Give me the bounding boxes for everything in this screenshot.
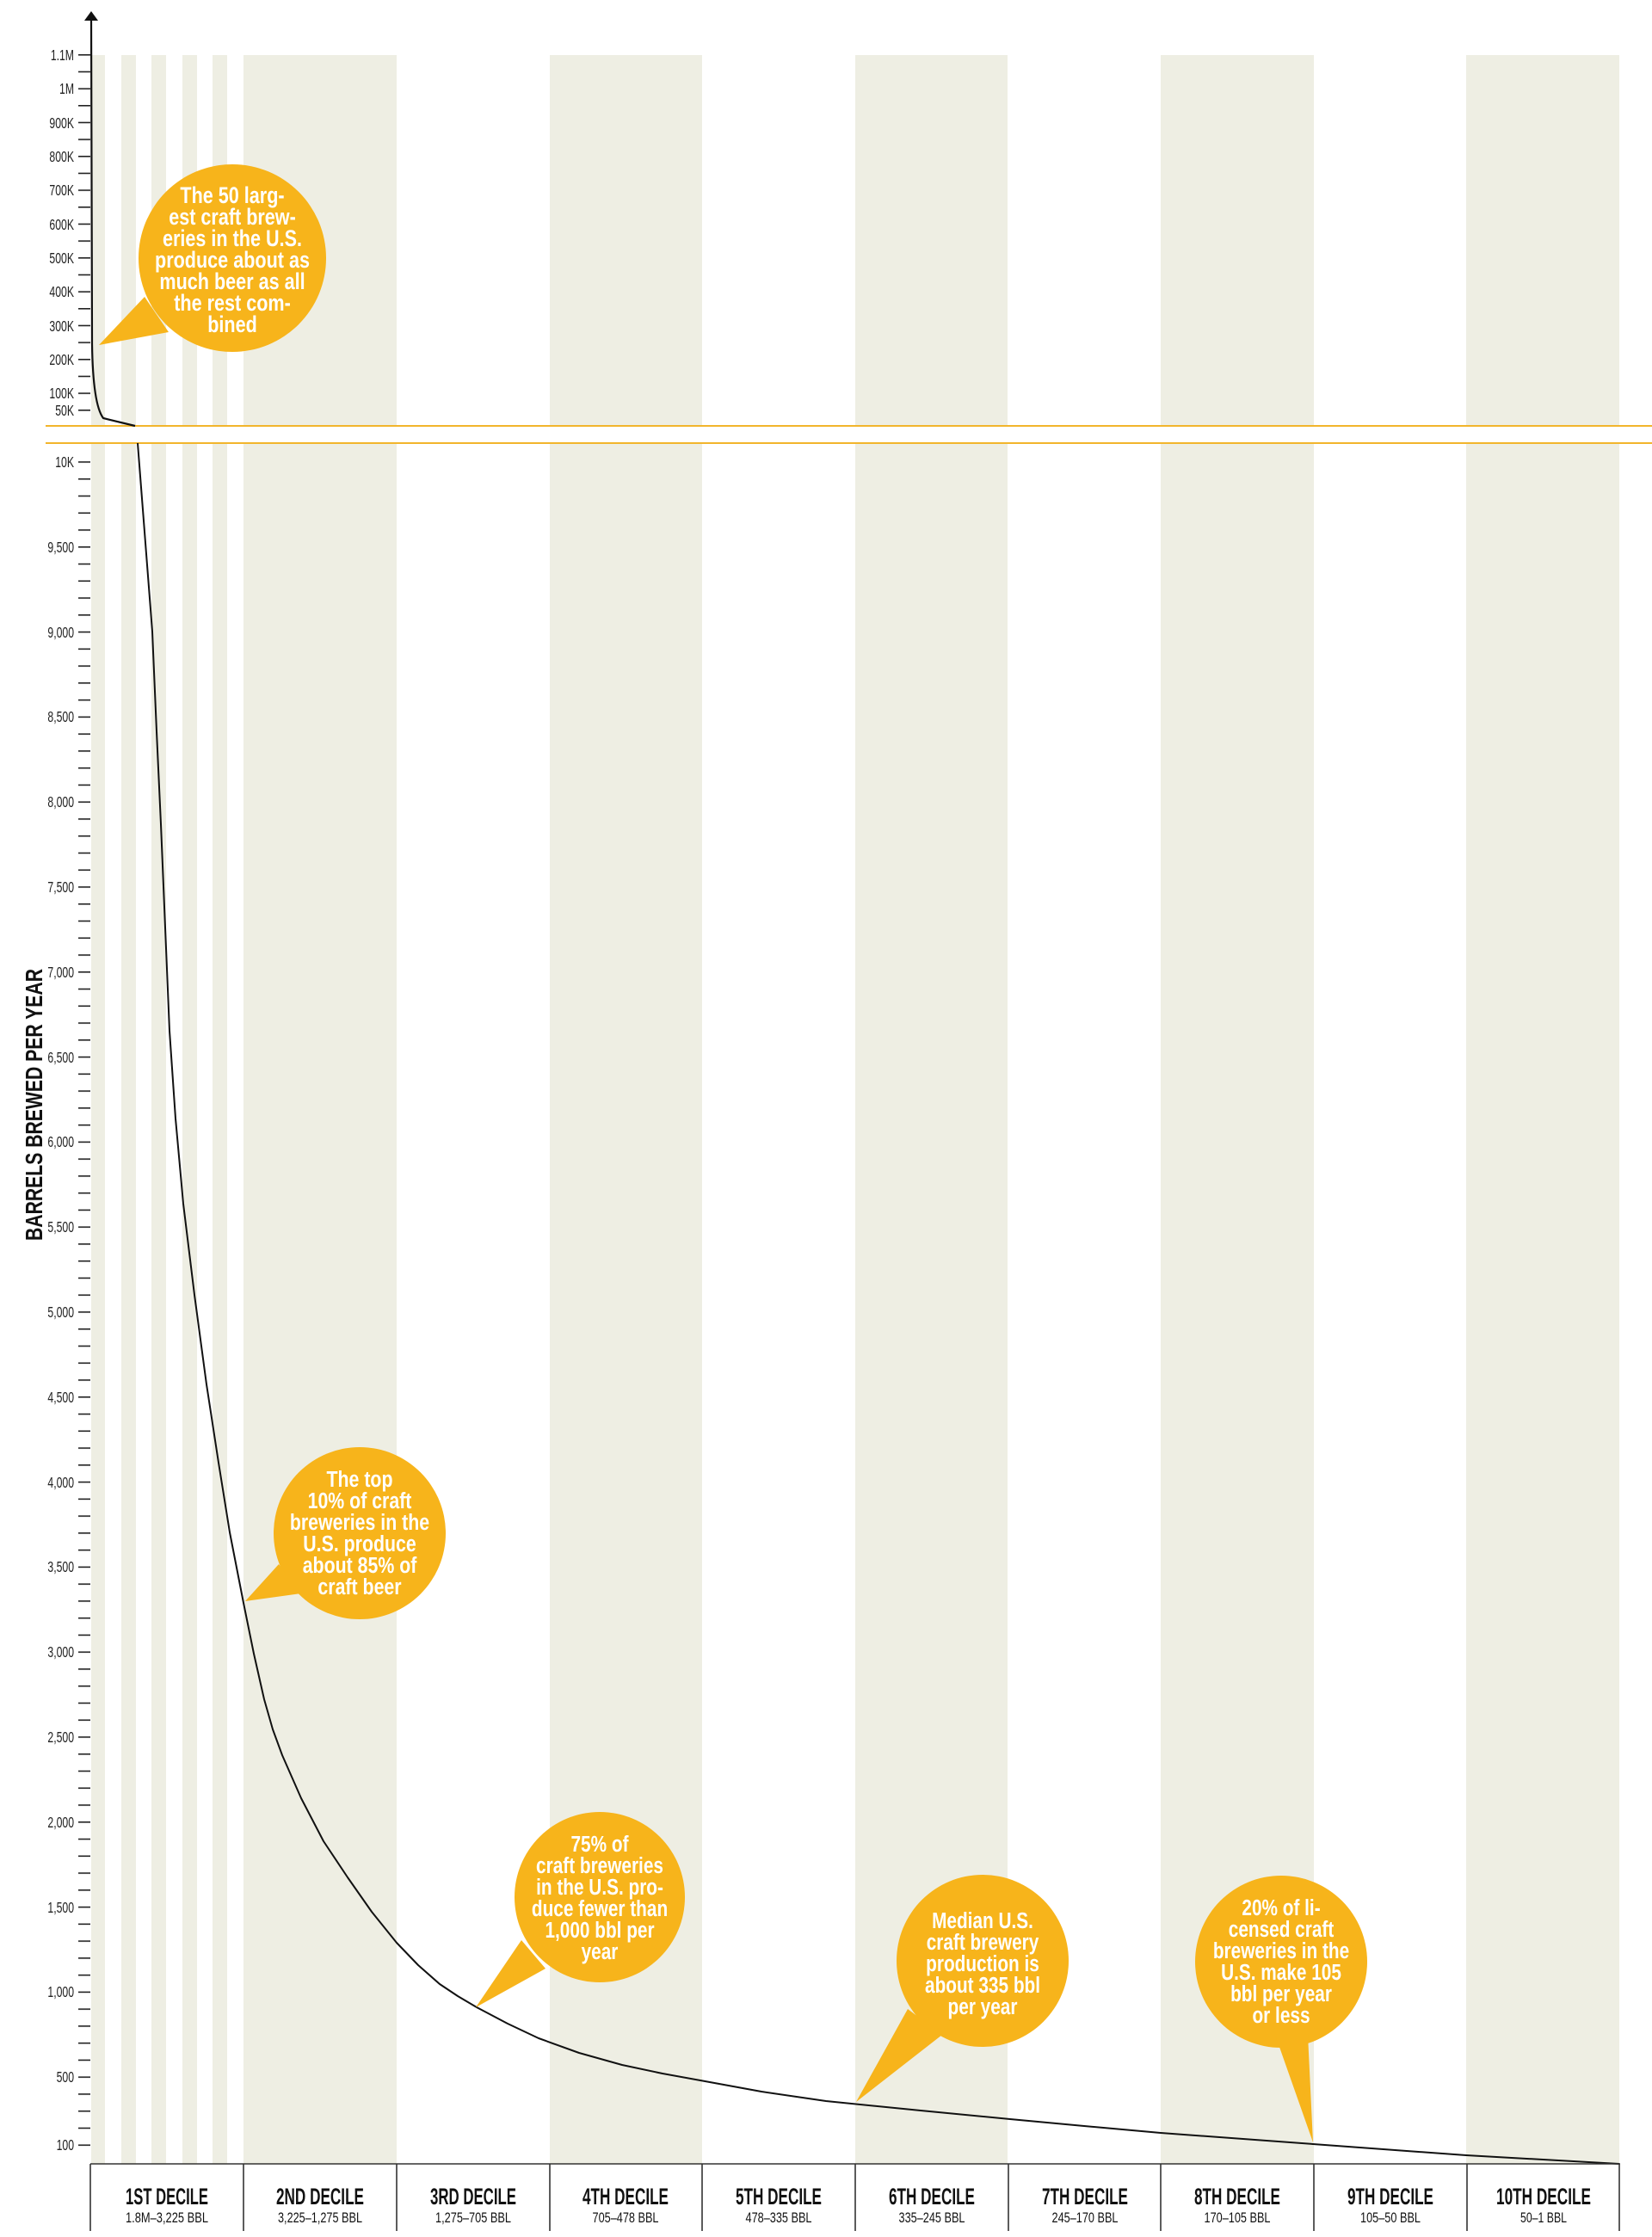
decile labels: 8TH DECILE xyxy=(1194,2184,1280,2209)
callout: median 335 bbl: production is xyxy=(926,1951,1039,1976)
callout: 20% make 105 bbl: censed craft xyxy=(1229,1917,1334,1942)
callout: 50 largest breweries: bined xyxy=(207,312,257,338)
upper y-axis ticks and labels: 100K xyxy=(49,385,75,403)
upper y-axis ticks and labels: 900K xyxy=(49,115,75,132)
upper y-axis ticks and labels: 300K xyxy=(49,318,75,336)
callout: 75% under 1,000 bbl: duce fewer than xyxy=(532,1896,668,1921)
callout: 75% under 1,000 bbl: year xyxy=(582,1939,618,1964)
decile labels: 1,275–705 BBL xyxy=(435,2209,511,2226)
decile labels: 245–170 BBL xyxy=(1051,2209,1119,2226)
callout: 75% under 1,000 bbl: craft breweries xyxy=(536,1853,663,1878)
decile labels: 9TH DECILE xyxy=(1347,2184,1433,2209)
callout: median 335 bbl: craft brewery xyxy=(927,1930,1039,1955)
callout: top 10%: breweries in the xyxy=(290,1510,429,1536)
callout: 50 largest breweries: The 50 larg- xyxy=(180,183,285,209)
upper y-axis ticks and labels: 600K xyxy=(49,217,75,234)
upper y-axis ticks and labels: 400K xyxy=(49,284,75,301)
callout: 50 largest breweries xyxy=(99,164,326,352)
decile labels: 3,225–1,275 BBL xyxy=(278,2209,362,2226)
decile labels: 2ND DECILE xyxy=(276,2184,364,2209)
decile labels: 7TH DECILE xyxy=(1042,2184,1128,2209)
callout: 20% make 105 bbl xyxy=(1195,1876,1367,2142)
decile labels: 10TH DECILE xyxy=(1496,2184,1591,2209)
decile labels: 1ST DECILE xyxy=(126,2184,208,2209)
lower y-axis ticks and labels: 5,500 xyxy=(47,1219,74,1236)
decile labels xyxy=(126,2184,1591,2226)
upper y-axis ticks and labels: 700K xyxy=(49,182,75,200)
callout: 75% under 1,000 bbl: 75% of xyxy=(570,1832,629,1857)
callout: 50 largest breweries: much beer as all xyxy=(159,269,305,295)
callout: top 10%: The top xyxy=(327,1467,392,1493)
lower y-axis ticks and labels: 8,500 xyxy=(47,709,74,726)
lower y-axis ticks and labels: 7,000 xyxy=(47,964,74,982)
decile labels: 5TH DECILE xyxy=(736,2184,822,2209)
curve: upper xyxy=(91,17,135,426)
decile labels: 1.8M–3,225 BBL xyxy=(126,2209,208,2226)
decile labels: 6TH DECILE xyxy=(889,2184,975,2209)
decile labels: 335–245 BBL xyxy=(898,2209,965,2226)
callout: 20% make 105 bbl: bbl per year xyxy=(1230,1981,1332,2006)
lower y-axis ticks and labels: 100 xyxy=(57,2137,74,2154)
decile labels: 50–1 BBL xyxy=(1520,2209,1567,2226)
callout: 20% make 105 bbl: U.S. make 105 xyxy=(1221,1960,1341,1985)
lower y-axis ticks and labels: 5,000 xyxy=(47,1304,74,1322)
lower y-axis ticks and labels: 2,000 xyxy=(47,1815,74,1832)
lower y-axis ticks and labels: 9,000 xyxy=(47,625,74,642)
lower y-axis ticks and labels: 8,000 xyxy=(47,794,74,811)
callout: 20% make 105 bbl: breweries in the xyxy=(1213,1938,1349,1963)
callout: 50 largest breweries: eries in the U.S. xyxy=(163,226,302,252)
curve: lower xyxy=(138,443,1619,2164)
decile labels: 3RD DECILE xyxy=(430,2184,516,2209)
callout: top 10% xyxy=(245,1447,446,1619)
upper y-axis ticks and labels: 200K xyxy=(49,352,75,369)
decile labels: 4TH DECILE xyxy=(583,2184,669,2209)
lower y-axis ticks and labels: 10K xyxy=(55,454,75,471)
lower y-axis ticks and labels: 6,000 xyxy=(47,1134,74,1151)
lower y-axis ticks and labels: 7,500 xyxy=(47,879,74,897)
lower y-axis ticks and labels: 1,500 xyxy=(47,1900,74,1917)
axis break lines xyxy=(46,426,1652,443)
callout: 75% under 1,000 bbl: 1,000 bbl per xyxy=(545,1918,655,1943)
callout: 50 largest breweries: the rest com- xyxy=(174,291,291,317)
callout: top 10%: about 85% of xyxy=(303,1553,416,1579)
lower y-axis ticks and labels: 500 xyxy=(57,2069,74,2086)
lower y-axis ticks and labels: 6,500 xyxy=(47,1050,74,1067)
upper y-axis ticks and labels xyxy=(49,47,90,420)
lower y-axis ticks and labels: 4,500 xyxy=(47,1390,74,1407)
callout: top 10%: craft beer xyxy=(317,1575,402,1600)
decile labels: 105–50 BBL xyxy=(1360,2209,1421,2226)
callout: median 335 bbl: per year xyxy=(948,1994,1017,2019)
x-axis baseline and decile dividers xyxy=(90,2164,1620,2231)
callout: 20% make 105 bbl: 20% of li- xyxy=(1242,1895,1321,1920)
decile labels: 170–105 BBL xyxy=(1205,2209,1270,2226)
callout: median 335 bbl xyxy=(856,1875,1069,2102)
callout: 75% under 1,000 bbl xyxy=(476,1812,685,2007)
lower y-axis ticks and labels: 3,500 xyxy=(47,1559,74,1576)
upper y-axis ticks and labels: 800K xyxy=(49,149,75,166)
upper y-axis ticks and labels: 50K xyxy=(55,403,75,420)
callout: 50 largest breweries: est craft brew- xyxy=(169,205,296,231)
lower y-axis ticks and labels: 4,000 xyxy=(47,1475,74,1492)
decile labels: 705–478 BBL xyxy=(592,2209,659,2226)
callout: 50 largest breweries: produce about as xyxy=(155,248,310,274)
lower y-axis ticks and labels: 3,000 xyxy=(47,1644,74,1661)
lower y-axis ticks and labels: 9,500 xyxy=(47,539,74,557)
lower y-axis ticks and labels: 1,000 xyxy=(47,1984,74,2001)
upper y-axis ticks and labels: 1M xyxy=(59,81,74,98)
y-axis title: BARRELS BREWED PER YEAR xyxy=(21,969,47,1241)
callout: top 10%: 10% of craft xyxy=(308,1488,411,1514)
callout: median 335 bbl: Median U.S. xyxy=(932,1908,1033,1933)
arrow: y-axis top xyxy=(84,11,98,21)
callout: median 335 bbl: about 335 bbl xyxy=(925,1973,1040,1998)
callout: 20% make 105 bbl: or less xyxy=(1252,2003,1310,2028)
upper y-axis ticks and labels: 1.1M xyxy=(51,47,74,65)
callout: top 10%: U.S. produce xyxy=(303,1531,416,1557)
callout: 75% under 1,000 bbl: in the U.S. pro- xyxy=(536,1875,663,1900)
upper y-axis ticks and labels: 500K xyxy=(49,250,75,268)
decile labels: 478–335 BBL xyxy=(745,2209,812,2226)
lower y-axis ticks and labels xyxy=(47,454,90,2154)
lower y-axis ticks and labels: 2,500 xyxy=(47,1729,74,1747)
